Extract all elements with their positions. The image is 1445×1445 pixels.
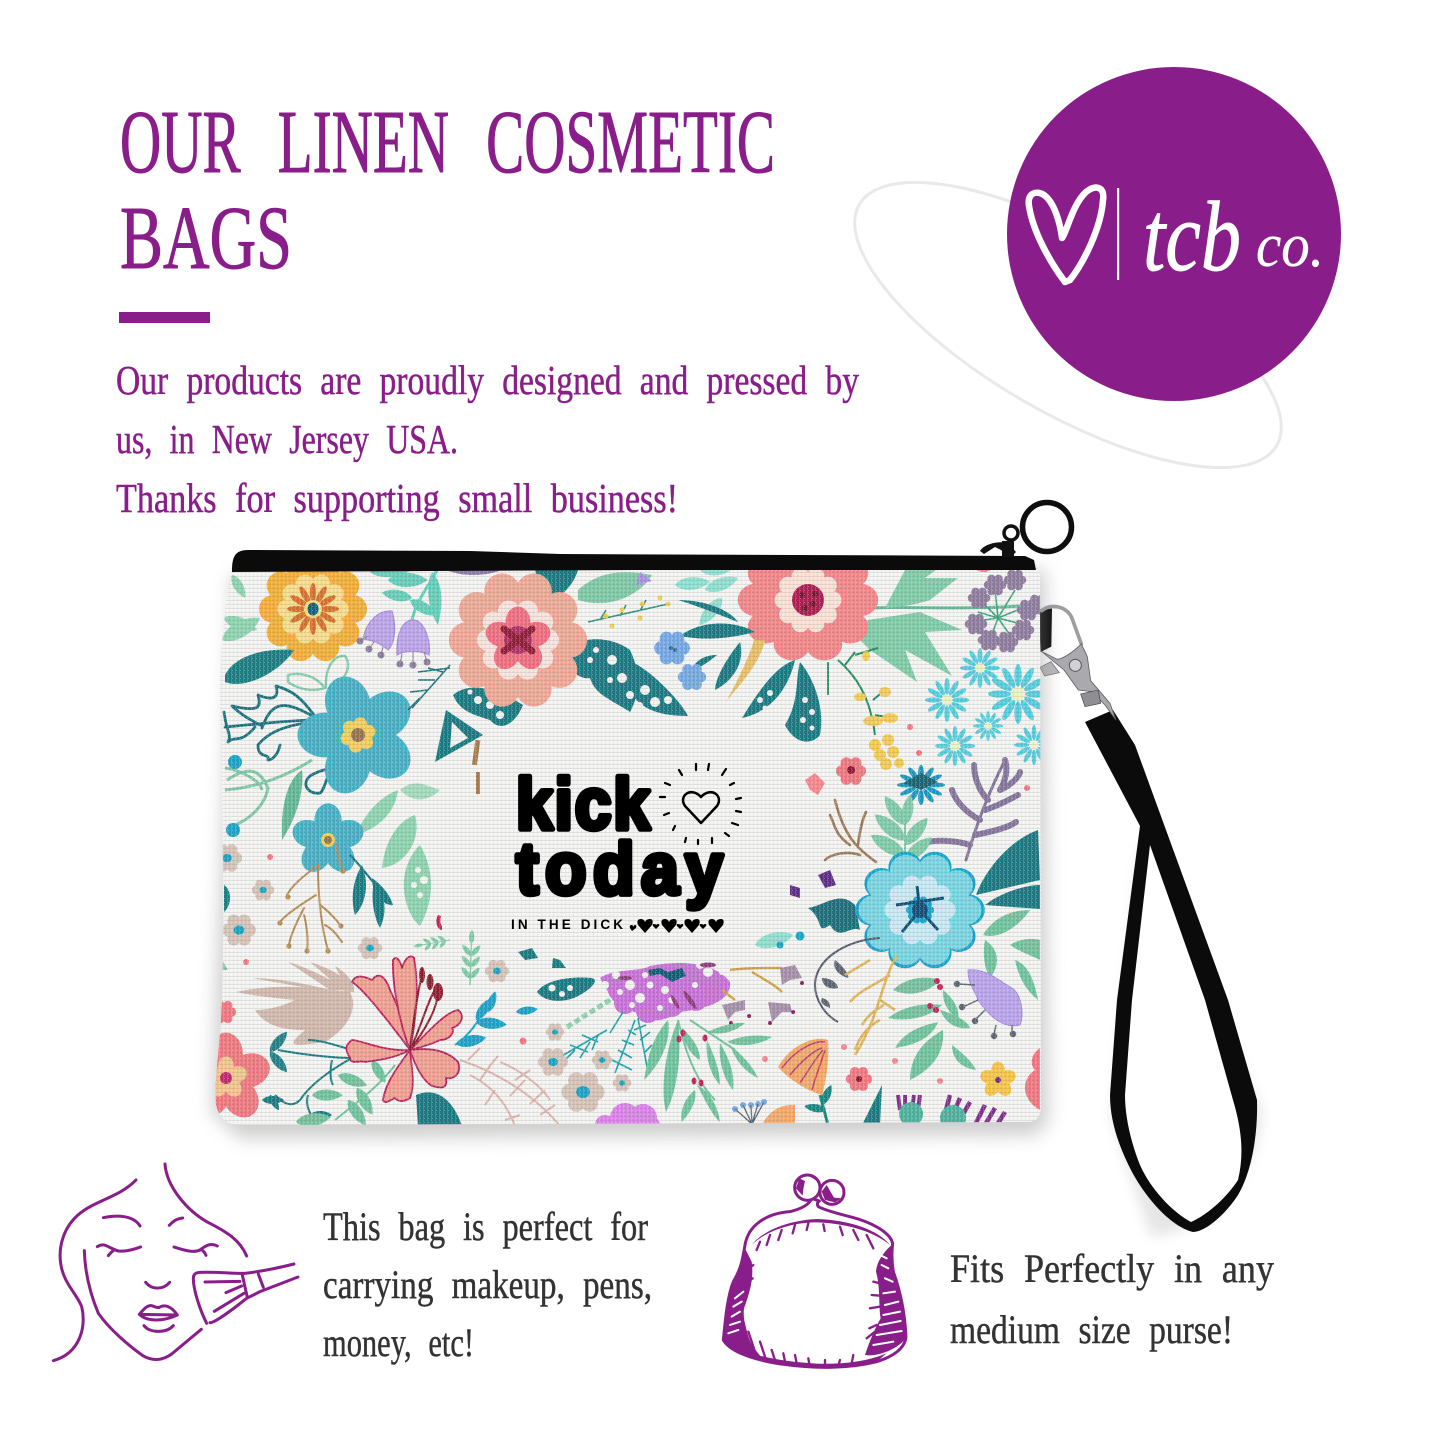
- outlined teal leaves: [224, 686, 332, 793]
- beige-pink branch: [460, 1048, 560, 1126]
- mint leaves left: [355, 783, 440, 926]
- intro paragraph: [116, 357, 859, 521]
- brown twig: [280, 845, 343, 950]
- intro paragraph: us, in New Jersey USA.: [116, 416, 458, 462]
- right-side big blue flower: [808, 830, 1040, 1080]
- top-right florals: [654, 570, 1040, 898]
- title: OUR LINEN COSMETIC: [120, 93, 775, 192]
- slogan words: [516, 763, 723, 910]
- top-left florals: [212, 552, 526, 1044]
- right-edge coral: [1025, 1048, 1040, 1110]
- decorative ellipse ring behind logo: [815, 128, 1321, 522]
- text: purse fit: medium size purse!: [950, 1307, 1233, 1352]
- beige palm leaf: [236, 962, 354, 1045]
- bag shadow: [212, 570, 1048, 1138]
- logo wordmark: [1143, 181, 1324, 292]
- blue sprig: [455, 990, 538, 1049]
- purse clasp beads: [795, 1175, 844, 1204]
- dark teal leaf: [416, 1092, 462, 1126]
- logo wordmark: tcb: [1143, 181, 1241, 292]
- yellow flower: [978, 1062, 1018, 1099]
- small beige flowers: [212, 844, 509, 982]
- purple distressed flower: [600, 961, 730, 1023]
- text: bag uses: carrying makeup, pens,: [323, 1262, 652, 1307]
- slogan tagline: IN THE DICK: [511, 917, 623, 932]
- teal leaf: [225, 650, 294, 684]
- slogan words: today: [516, 828, 723, 910]
- small mint sprigs near centre: [412, 929, 483, 985]
- gold twigs: [845, 955, 897, 1055]
- metal lobster clasp: [1038, 607, 1116, 720]
- mint sprig behind: [675, 570, 738, 625]
- zipper tape: [232, 550, 1036, 572]
- green fern: [870, 794, 932, 857]
- purple bells: [363, 611, 429, 655]
- blue flower: [298, 676, 410, 794]
- text: bag uses: money, etc!: [323, 1320, 474, 1365]
- top-centre pink flower: [408, 566, 688, 794]
- logo badge: [1007, 67, 1341, 401]
- bottom-left florals: [216, 915, 560, 1125]
- orange flower: [259, 571, 367, 661]
- title accent bar: [119, 312, 210, 323]
- text: bag uses: [323, 1204, 652, 1365]
- linen bag with floral print: [178, 502, 1072, 1135]
- title: [120, 93, 775, 288]
- title: BAGS: [120, 189, 292, 288]
- heart with sun rays: [660, 764, 741, 844]
- large coral flower: [738, 570, 878, 660]
- green leaves right: [983, 910, 1040, 1000]
- grey curl: [815, 938, 880, 1022]
- slogan hearts row: [630, 919, 724, 933]
- green arcs stems: [225, 760, 312, 826]
- green leaves: [644, 1020, 772, 1122]
- outlined mint leaves: [288, 656, 348, 690]
- chain fragment: [567, 1000, 610, 1027]
- wristlet strap: [1085, 710, 1262, 1235]
- text: purse fit: Fits Perfectly in any: [950, 1246, 1274, 1291]
- yellow sprig: [588, 600, 668, 622]
- beige small flowers: [538, 1023, 631, 1112]
- purple bell flower: [968, 970, 1022, 1026]
- yellow clump: [869, 734, 904, 770]
- cyan daisies: [925, 648, 1040, 766]
- clasp hook: [1042, 607, 1081, 644]
- small blue flower: [292, 803, 364, 872]
- brown fragments: [472, 740, 480, 794]
- purse white highlights on shading: [728, 1255, 902, 1345]
- purse left shading: [724, 1248, 763, 1360]
- small pink flowers: [836, 757, 866, 785]
- teal fine sprig: [408, 665, 450, 710]
- mauve bell sprigs: [722, 965, 802, 1022]
- pink lily: [346, 956, 462, 1102]
- blue berries: [732, 1099, 767, 1112]
- teal mint sprig cyan: [753, 928, 795, 952]
- teal sprig with blue flowers: [678, 600, 821, 742]
- teal fine sprig: [560, 1012, 652, 1073]
- thistles: [898, 1095, 1005, 1131]
- icon: face with makeup brush: [53, 1164, 298, 1361]
- printed slogan: [511, 763, 741, 933]
- orange fan flower: [762, 1039, 835, 1125]
- brown branch: [825, 800, 876, 862]
- green sprig: [295, 1058, 395, 1128]
- purse hatching: [742, 1223, 880, 1366]
- distressed teal fragments: [518, 948, 595, 1001]
- slogan words: kick: [516, 763, 650, 845]
- purse right shading: [865, 1245, 905, 1355]
- text: bag uses: This bag is perfect for: [323, 1204, 648, 1249]
- intro paragraph: Our products are proudly designed and pressed by: [116, 357, 859, 403]
- logo wordmark: co.: [1256, 212, 1324, 280]
- text: purse fit: [950, 1246, 1274, 1352]
- purse frame underside: [752, 1219, 890, 1245]
- icon: coin purse: [723, 1175, 906, 1367]
- yellow sprig: [827, 647, 884, 736]
- intro paragraph: Thanks for supporting small business!: [116, 475, 678, 521]
- clasp body: [1041, 644, 1116, 720]
- cornflower: [897, 765, 945, 805]
- left-edge coral flower: [216, 1032, 270, 1118]
- zipper pull and ring: [980, 502, 1072, 558]
- pink bottom flower: [595, 1103, 660, 1135]
- mint sprig: [370, 571, 442, 625]
- purse outline: [723, 1198, 906, 1367]
- purple fern: [928, 760, 1020, 860]
- bottom-centre florals: [518, 928, 1040, 1135]
- green leaves centre-right: [888, 978, 976, 1080]
- clasp fabric tab: [1038, 609, 1052, 652]
- purse bottom band: [723, 1340, 887, 1367]
- logo divider: [1117, 188, 1119, 280]
- purple dill: [978, 590, 1017, 633]
- logo heart icon: [1029, 188, 1103, 282]
